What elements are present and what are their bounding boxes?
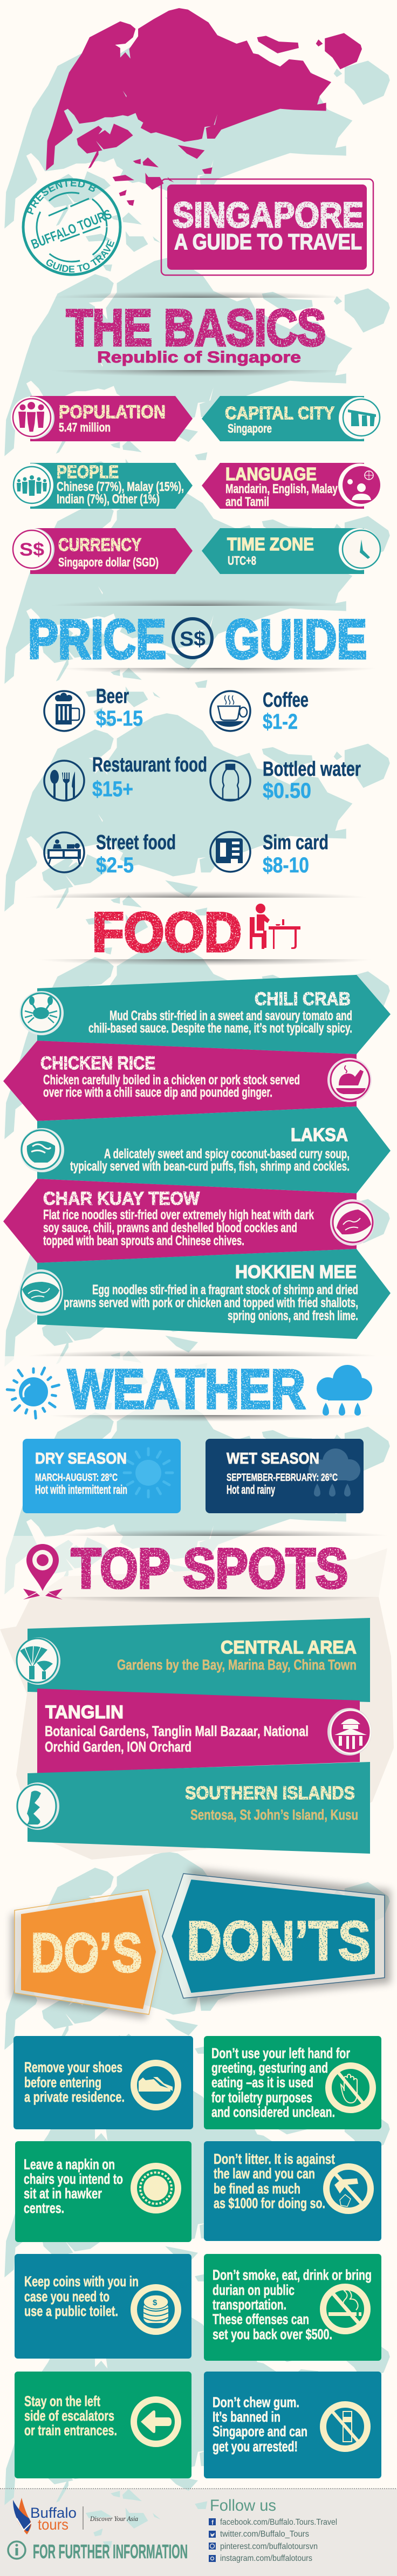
price: beer: $5-15 [96,707,143,730]
stamp: presented by Buffalo Tours [22,178,122,276]
price: bottled water: Bottled water [263,758,361,781]
tip: stay on the left [15,2372,191,2478]
price: sim card [210,831,328,877]
banner: laksa: LAKSA [291,1125,348,1145]
tip: don't use your left hand: Don’t use your left hand for [211,2045,350,2061]
card: population: 5.47 million [59,420,111,434]
tip: leave a napkin: sit at in hawker [24,2185,102,2202]
panel: do's [11,1890,162,2019]
footer divider [0,2488,397,2489]
price: coffee [210,689,309,734]
heading: top spots: TOP SPOTS [71,1538,348,1600]
card: currency: CURRENCY [58,535,141,555]
tip: don't smoke: These offenses can [213,2311,309,2327]
tip: don't chew gum: get you arrested! [213,2438,298,2455]
icon: coffee cup [216,695,247,726]
card: people: PEOPLE [57,462,119,482]
shadow: food band [25,891,372,966]
tip: don't smoke: durian on public [213,2282,295,2298]
card: people: Indian (7%), Other (1%) [57,492,160,507]
panel: tanglin: Botanical Gardens, Tanglin Mall Bazaar, National [45,1723,309,1739]
icon: S$ coin [173,619,212,658]
icon: laksa bowl [20,1128,64,1172]
heading: the basics: THE BASICS [66,299,326,357]
icon: water bottle [223,764,238,800]
price: street food [44,831,176,877]
price: street food: Street food [96,831,176,854]
card: dry season [23,1439,181,1513]
tip: remove your shoes [13,2036,193,2129]
tip: don't litter: be fined as much [214,2181,300,2197]
tip: don't litter: Don’t litter. It is against [214,2151,335,2167]
title sign [161,179,373,275]
card: population [11,396,193,441]
tip: don't smoke: set you back over $500. [213,2326,332,2342]
panel: tanglin [37,1689,360,1773]
tip: leave a napkin: chairs you intend to [24,2171,123,2187]
title sign: SINGAPORE [173,195,364,235]
tip: remove your shoes: Remove your shoes [24,2059,122,2075]
icon: rain cloud [317,1365,372,1416]
logo: Buffalo Tours: Discover Your Asia [90,2514,138,2523]
banner: char kuay teow [3,1179,357,1263]
shadow: the basics band [51,291,345,377]
link: facebook: f [211,2519,214,2526]
card: capital city: Singapore [228,421,272,435]
follow us [209,2497,337,2563]
banner: chicken rice: over rice with a chili sauce dip and pounded ginger. [43,1085,272,1100]
price: beer [44,685,143,731]
tip: don't use your left hand: greeting, gesturing and [211,2060,328,2076]
banner: laksa [37,1106,391,1193]
icon: shoes [134,2063,178,2107]
icon: merlion [16,1782,59,1830]
banner: chicken rice: CHICKEN RICE [40,1053,155,1074]
tip: don't chew gum: Don’t chew gum. [213,2394,299,2410]
link: pinterest: pinterest.com/buffalotoursvn [220,2542,318,2551]
price: bottled water: $0.50 [263,779,311,803]
price: beer: Beer [96,685,129,708]
icon: char kuay teow plate [330,1199,374,1246]
panel: central area: CENTRAL AREA [221,1637,357,1658]
tip: leave a napkin [15,2141,191,2242]
tip: remove your shoes: a private residence. [24,2089,125,2105]
banner: hokkien mee [37,1249,391,1339]
panel: southern islands: SOUTHERN ISLANDS [185,1783,355,1803]
card: language: and Tamil [225,495,269,509]
tip: don't use your left hand: and considered unclean. [211,2104,335,2120]
icon: cutlery [50,770,75,800]
shadow and band: weather [0,1350,397,1422]
card: people [10,462,193,509]
tip: don't smoke: transportation. [213,2297,286,2313]
banner: chili crab [37,975,391,1054]
banner: hokkien mee: HOKKIEN MEE [235,1262,357,1282]
tip: don't use your left hand: eating –as it is used [211,2074,313,2090]
banner: chicken rice [3,1041,357,1121]
icon: speaker with globe [347,471,373,500]
heading: weather: WEATHER [68,1358,305,1420]
shadow and band: top spots [0,1529,397,1603]
icon: sim card [216,838,243,863]
tip: don't litter: the law and you can [214,2165,315,2182]
price: coffee: Coffee [263,689,309,712]
card: people: Chinese (77%), Malay (15%), [57,480,184,494]
follow us: Follow us [210,2497,276,2514]
icon: S$ coin: S$ [180,628,206,651]
icon: faded sun [124,1448,173,1497]
price: street food: $2-5 [96,853,134,877]
icon: no littering [326,2167,371,2211]
logo: Buffalo Tours: tours [38,2516,69,2533]
icon: diner at table [250,904,300,949]
heading: the basics: Republic of Singapore [97,349,301,366]
card: currency [11,528,193,574]
icon: coins [134,2287,178,2332]
shadow: price guide band [51,599,378,674]
banner: char kuay teow: topped with bean sprouts and Chinese chives. [43,1233,244,1248]
hero map of Singapore [46,8,362,206]
for further information [8,2540,188,2563]
tip: don't chew gum: It’s banned in [213,2409,280,2425]
tip: remove your shoes: before entering [24,2074,101,2090]
price: restaurant food: $15+ [92,777,133,801]
icon: food stall [47,839,81,864]
tip: don't litter [204,2141,381,2241]
card: wet season: WET SEASON [227,1450,319,1467]
panel: don'ts: DON’TS [187,1910,371,1972]
card: time zone [202,528,381,574]
icon: faded rain cloud [309,1448,360,1497]
icon: left arrow [134,2400,178,2444]
link: facebook: facebook.com/Buffalo.Tours.Travel [220,2518,337,2527]
tip: don't chew gum: Singapore and can [213,2423,307,2440]
tip: leave a napkin: centres. [24,2200,64,2216]
tip: don't smoke [204,2254,381,2361]
icon: tick [77,1945,92,1958]
icon: tanglin building [327,1708,372,1755]
icon: marina bay sands [348,409,376,426]
tip: stay on the left: side of escalators [24,2408,114,2424]
icon: crab [19,991,64,1035]
link: twitter: twitter.com/Buffalo_Tours [220,2530,309,2539]
icon: crowd [17,475,47,496]
icon: S$: S$ [19,539,44,560]
icon: no left hand [328,2066,373,2110]
stamp: presented by Buffalo Tours: BUFFALO TOURS [29,207,114,252]
logo: Buffalo Tours [13,2498,138,2534]
price: sim card: Sim card [263,831,328,854]
price: bottled water [210,758,361,803]
icon: location pin [23,1544,63,1600]
card: dry season: DRY SEASON [35,1450,127,1467]
card: language [202,463,381,509]
card: capital city: CAPITAL CITY [225,403,334,423]
card: time zone: TIME ZONE [227,534,314,554]
heading: price guide [28,609,367,670]
tip: stay on the left: or train entrances. [24,2422,117,2438]
icon: people group [18,402,44,432]
icon: beer mug [55,693,79,725]
tip: stay on the left: Stay on the left [24,2393,100,2409]
card: wet season [206,1439,364,1513]
banner: char kuay teow: CHAR KUAY TEOW [43,1188,200,1209]
panel: don'ts [162,1868,391,2004]
icon: info [8,2541,25,2559]
tip: keep coins [15,2254,191,2359]
footer background [0,2489,397,2576]
icon: chicken [327,1058,372,1102]
tip: don't chew gum [204,2372,381,2478]
link: instagram: instagram.com/buffalotours [220,2554,312,2563]
card: population: POPULATION [59,402,166,422]
tip: don't use your left hand [204,2036,381,2129]
icon: supertrees [16,1637,60,1685]
price: restaurant food [44,754,207,801]
price: sim card: $8-10 [263,853,309,877]
card: language: Mandarin, English, Malay [225,482,338,496]
icon: no chewing gum [323,2404,367,2449]
heading: price guide: PRICE [28,609,166,670]
tip: don't use your left hand: for toiletry purposes [211,2089,312,2106]
price: restaurant food: Restaurant food [92,754,207,776]
price: coffee: $1-2 [263,710,298,734]
tip: don't litter: as $1000 for doing so. [214,2195,325,2211]
card: dry season: Hot with intermittent rain [35,1482,127,1497]
banner: chili crab: CHILI CRAB [255,989,351,1009]
card: wet season: SEPTEMBER-FEBRUARY: 26°C [227,1472,338,1484]
card: dry season: MARCH-AUGUST: 28°C [35,1472,118,1484]
icon: cross [236,1933,249,1946]
tip: keep coins: case you need to [24,2288,109,2305]
icon: coins: $ [153,2298,158,2307]
panel: tanglin: Orchid Garden, ION Orchard [45,1739,191,1755]
panel: do's: DO’S [31,1922,142,1984]
heading: price guide: GUIDE [225,609,367,670]
icon: no smoking [323,2287,367,2331]
heading: food: FOOD [92,901,242,963]
icon: sun [7,1368,59,1418]
panel: central area [28,1618,370,1702]
tip: leave a napkin: Leave a napkin on [24,2156,115,2172]
icon: clock hands [360,539,370,559]
card: language: LANGUAGE [225,464,317,484]
tip: keep coins: Keep coins with you in [24,2273,139,2290]
icon: napkin [134,2166,178,2210]
card: time zone: UTC+8 [228,554,256,568]
title sign: A GUIDE TO TRAVEL [174,229,362,254]
card: capital city [202,396,381,441]
panel: southern islands [28,1762,370,1854]
tip: keep coins: use a public toilet. [24,2303,118,2319]
panel: tanglin: TANGLIN [45,1702,124,1723]
card: currency: Singapore dollar (SGD) [58,555,159,569]
card: wet season: Hot and rainy [227,1482,275,1497]
for further information: FOR FURTHER INFORMATION [33,2540,188,2563]
logo: Buffalo Tours: Buffalo [30,2505,77,2521]
icon: hokkien mee plate [19,1269,63,1316]
